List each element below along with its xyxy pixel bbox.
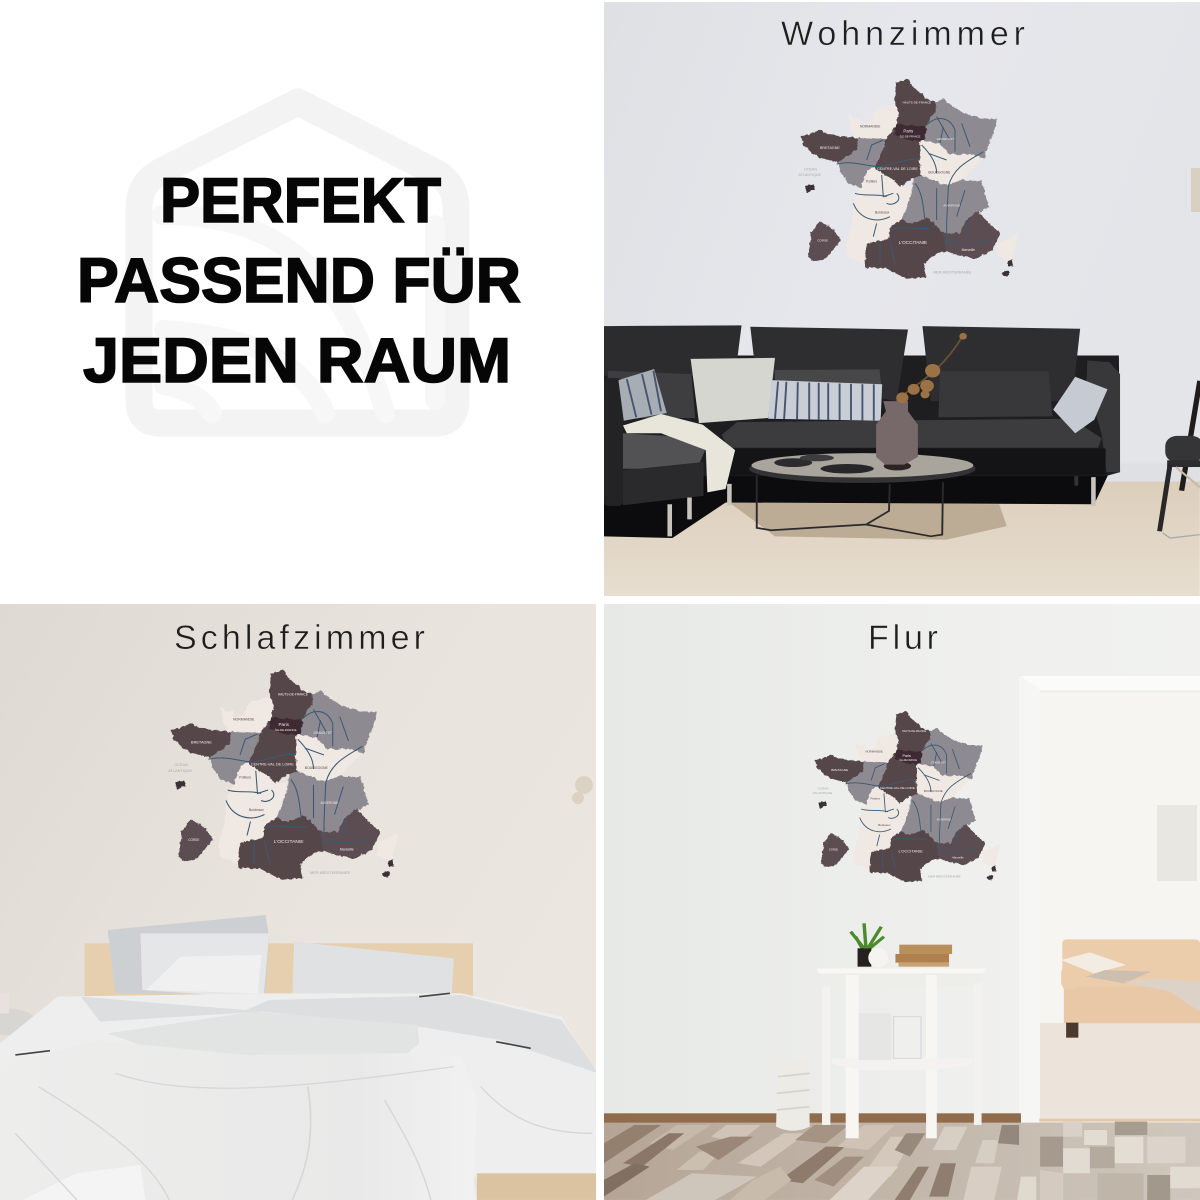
title	[77, 166, 521, 396]
side room	[1019, 676, 1200, 1125]
coffee table	[749, 453, 976, 536]
title: PASSEND FÜR	[77, 246, 521, 316]
door frame	[1020, 676, 1200, 690]
wall art	[1157, 805, 1197, 881]
Wohnzimmer map	[798, 79, 1017, 278]
chair	[1160, 381, 1200, 538]
vase with dried branch	[876, 333, 967, 465]
label: Schlafzimmer: Schlafzimmer	[174, 619, 425, 657]
title: PERFEKT	[160, 166, 441, 236]
plant and books	[851, 923, 952, 967]
peach sofa	[1061, 939, 1200, 1038]
panel: Wohnzimmer	[604, 2, 1200, 603]
sofa scene	[604, 325, 1200, 603]
panel: Schlafzimmer	[0, 604, 600, 1200]
label: Wohnzimmer: Wohnzimmer	[781, 15, 1025, 53]
icon: wall lamp edge	[1191, 168, 1200, 212]
floor and skirting	[604, 923, 1200, 1200]
icon: house logo watermark	[139, 102, 456, 423]
panel: Flur	[604, 604, 1200, 1200]
label: Flur: Flur	[868, 619, 938, 657]
Schlafzimmer map	[168, 670, 398, 879]
bed	[0, 915, 600, 1200]
dried plant	[572, 776, 593, 804]
Flur map	[813, 712, 1000, 882]
console table	[816, 968, 987, 1138]
vase	[776, 1113, 810, 1131]
title: JEDEN RAUM	[83, 326, 511, 396]
panel: headline with watermark	[77, 102, 521, 423]
